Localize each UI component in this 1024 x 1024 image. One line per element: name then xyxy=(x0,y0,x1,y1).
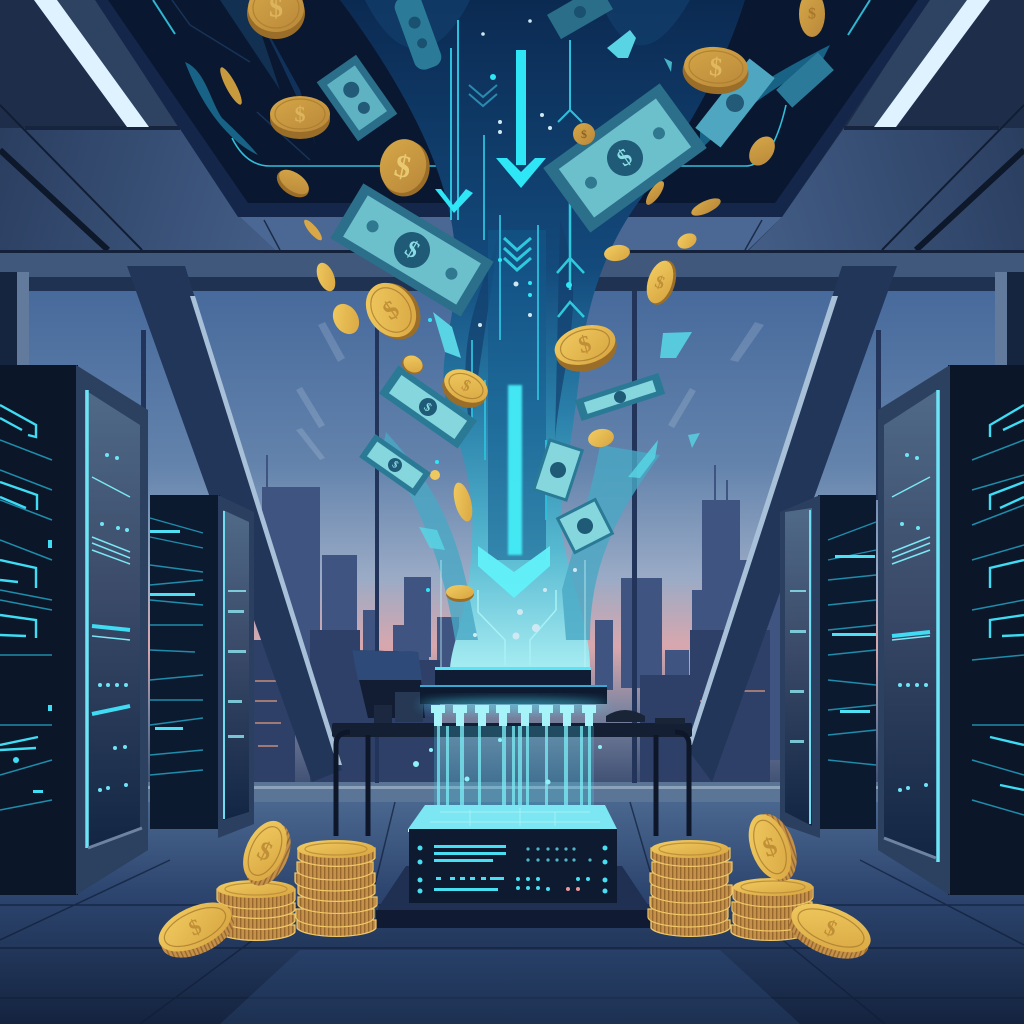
ceiling xyxy=(0,0,1024,291)
base server unit xyxy=(376,805,650,928)
coin on floor right: $ xyxy=(821,914,841,942)
coin on floor left xyxy=(151,892,242,968)
bill: upper right xyxy=(695,58,775,148)
machine top unit with connectors xyxy=(418,667,608,726)
small server rack right xyxy=(780,495,876,838)
diagonal columns xyxy=(127,266,897,782)
falling coins: $ xyxy=(581,127,587,141)
bill: upper center xyxy=(392,0,444,72)
bill: top strip xyxy=(547,0,613,39)
ceiling lights xyxy=(34,0,990,127)
falling coins: $ xyxy=(294,102,306,126)
coin stacks left xyxy=(151,814,377,968)
bill: lower right xyxy=(575,373,665,421)
bill: lower left: $ xyxy=(422,400,434,414)
bill: large left: $ xyxy=(400,236,424,264)
falling coins: $ xyxy=(653,271,667,293)
coin stacks right xyxy=(648,807,877,969)
falling coins: $ xyxy=(459,377,473,395)
coin leaning left: $ xyxy=(253,835,277,867)
bill: lower left xyxy=(379,366,477,448)
large server rack right xyxy=(878,365,1024,895)
bill: curl right xyxy=(534,440,582,500)
stack: tall right xyxy=(648,848,732,936)
coin on floor left: $ xyxy=(185,913,205,941)
stack: tall left xyxy=(295,848,377,936)
bill: large left xyxy=(330,183,494,317)
large server rack left xyxy=(0,365,148,895)
bill: far upper right xyxy=(776,52,834,108)
falling coins: $ xyxy=(708,52,724,82)
falling bills xyxy=(317,0,834,552)
bill: lower far left xyxy=(359,434,431,496)
falling coins xyxy=(217,0,825,602)
paper shards xyxy=(419,30,700,550)
floor xyxy=(0,802,1024,1024)
bill: large right xyxy=(543,83,707,233)
falling coins: $ xyxy=(576,331,594,359)
stack: short right xyxy=(731,887,813,940)
desk xyxy=(332,650,692,836)
bill: upper left xyxy=(317,55,397,141)
stack: short left xyxy=(217,889,295,940)
light beams xyxy=(413,726,602,808)
bill: large right: $ xyxy=(613,144,637,172)
stream arrows xyxy=(408,19,585,668)
city skyline xyxy=(28,455,996,802)
falling coins: $ xyxy=(377,294,405,326)
coin leaning left xyxy=(233,814,300,893)
recessed ceiling panel xyxy=(95,0,930,217)
coin leaning right: $ xyxy=(759,831,781,863)
falling coins: $ xyxy=(808,6,816,22)
small server rack left xyxy=(150,495,254,838)
central data stream xyxy=(185,0,830,668)
bill: bottom right xyxy=(558,500,612,552)
window and sky xyxy=(28,291,996,786)
desk monitor xyxy=(352,650,425,718)
falling coins: $ xyxy=(391,147,415,185)
coin leaning right xyxy=(741,807,805,888)
window mullions xyxy=(0,272,1024,783)
bill: lower far left: $ xyxy=(390,459,400,471)
coin on floor right xyxy=(782,894,877,969)
